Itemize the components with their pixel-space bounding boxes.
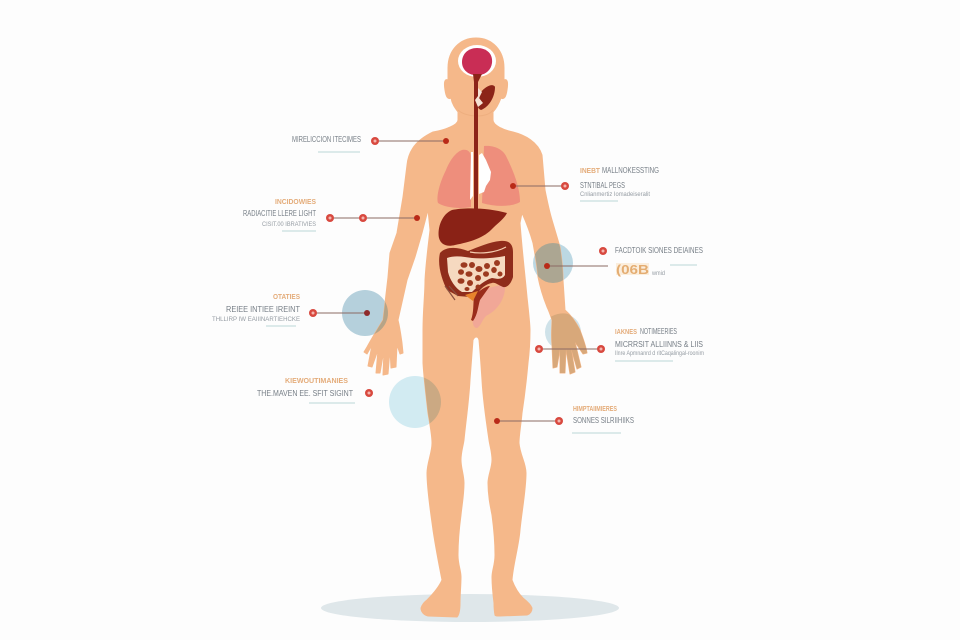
rectum [471, 286, 490, 321]
callout: thigh right [494, 404, 634, 433]
callout: middle left [212, 292, 370, 326]
callout: middle left: THLLIRP IW EAIIINARTIEHCKE [212, 316, 301, 323]
callout: upper right: STNTIBAL PEGS [580, 181, 625, 190]
callout: upper right: MALLNOKESSTING [602, 166, 659, 175]
callout: middle left: REIEE INTIEE IREINT [226, 305, 300, 314]
callout: hand right: MICRRSIT ALLIINNS & LIIS [615, 340, 703, 349]
ground shadow [321, 594, 619, 622]
callout: top left [292, 135, 449, 152]
callout: thigh right: SONNES SILRIIHIIKS [573, 416, 634, 425]
callout: middle left: OTATIES [273, 292, 300, 301]
callout: lower left: THE.MAVEN EE. SFIT SIGINT [257, 389, 353, 398]
highlighted number: wmid [651, 270, 665, 277]
pale blue circles [342, 243, 581, 428]
callout: upper left: INCIDOWIES [275, 197, 316, 206]
body silhouette [364, 38, 587, 617]
stomach highlight [470, 247, 506, 253]
callout: hand right: Ilnre Apmnanrd d ritCaqalingal-roonim [615, 350, 704, 357]
oesophagus and throat organ [473, 74, 495, 215]
callout: lower left: KIEWOUTIMANIES [285, 376, 348, 385]
callout: lower left [257, 376, 373, 403]
circle overlaps on the body [374, 243, 587, 424]
appendix [445, 286, 478, 301]
callout: top left: MIRELICCION ITECIMES [292, 135, 361, 144]
callout: upper right: Cnlianmertiz Iomadeiseralit [580, 191, 650, 198]
callout: upper left [243, 197, 420, 231]
callout: hand right: IAKNES [615, 327, 637, 336]
callout: hand right: NOTIMEERIES [640, 327, 677, 336]
liver [439, 208, 507, 246]
callout: arm right: FACDTOIK SIONES DEIAINES [615, 246, 703, 255]
pelvic soft tissue [473, 284, 505, 328]
callout: arm right [544, 246, 703, 277]
small intestine [447, 256, 505, 292]
brain [458, 45, 496, 77]
callout: upper right: INEBT [580, 166, 600, 175]
lungs [437, 146, 520, 208]
callout: upper left: RADIACITIE LLERE LIGHT [243, 209, 316, 218]
callout: thigh right: HIMPTAIIMIERES [573, 404, 617, 413]
chin line [458, 110, 493, 116]
callout: upper right [510, 166, 659, 201]
highlighted number: (06B [616, 262, 649, 277]
large intestine [439, 241, 513, 297]
callout: hand right [535, 327, 704, 361]
human body figure [364, 38, 587, 617]
highlighted number [616, 262, 665, 277]
callout: upper left: CISIT.00 IBRATIVIES [262, 221, 317, 228]
